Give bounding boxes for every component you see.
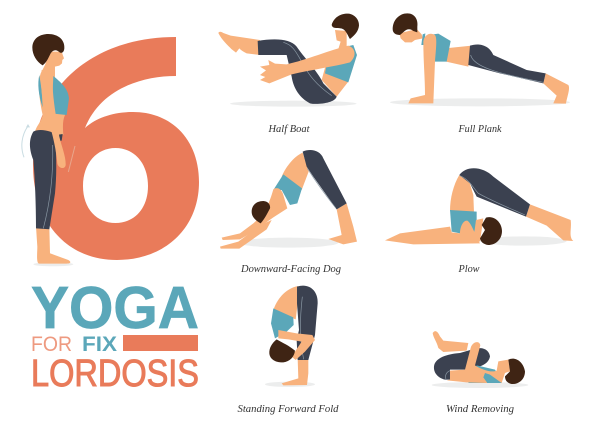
label: standing forward fold: Standing Forward Fold: [238, 404, 339, 415]
title: FIX: FIX: [82, 333, 117, 356]
title: FOR: FOR: [31, 333, 72, 356]
hair: [252, 201, 270, 223]
leggings: [30, 130, 63, 229]
arm: [278, 330, 315, 360]
hair: [393, 13, 418, 35]
big number 6: [33, 37, 199, 260]
torso and arm: [447, 342, 510, 383]
arms: [260, 46, 355, 83]
sports top: [325, 45, 357, 82]
sports top: [468, 365, 502, 383]
arm: [408, 34, 436, 103]
title: LORDOSIS: LORDOSIS: [31, 353, 199, 395]
sports top: [273, 174, 302, 205]
pose: plow: [385, 168, 573, 246]
arm: [41, 70, 66, 168]
sports top: [421, 33, 451, 62]
pose: downward-facing dog: [220, 150, 357, 249]
arms: [222, 188, 287, 240]
label: half boat: Half Boat: [268, 124, 311, 135]
sports top: [38, 75, 69, 115]
leggings: [297, 286, 318, 360]
pose: full plank: [390, 13, 570, 106]
pose: standing forward fold: [265, 286, 318, 387]
leggings: [459, 168, 530, 217]
sports top: [450, 210, 477, 234]
title: YOGA: YOGA: [31, 275, 199, 341]
leggings: [258, 39, 337, 104]
hair: [332, 14, 359, 39]
figure: standing posture with lordosis: [22, 34, 75, 266]
hair: [505, 359, 525, 384]
arms: [385, 221, 480, 244]
label: downward-facing dog: Downward-Facing Dog: [240, 264, 341, 275]
leggings: [303, 150, 347, 209]
leggings: [468, 44, 546, 83]
label: plow: Plow: [458, 264, 480, 275]
hair: [32, 34, 64, 65]
pose: wind removing: [432, 331, 528, 388]
label: full plank: Full Plank: [458, 124, 502, 135]
lower leg and foot: [433, 331, 468, 352]
pose: half boat: [218, 14, 359, 107]
label: wind removing: Wind Removing: [446, 404, 514, 415]
title bar: [123, 335, 198, 351]
leggings: [434, 348, 490, 380]
sports top: [271, 308, 294, 338]
hair: [480, 217, 502, 245]
hair: [269, 339, 295, 362]
